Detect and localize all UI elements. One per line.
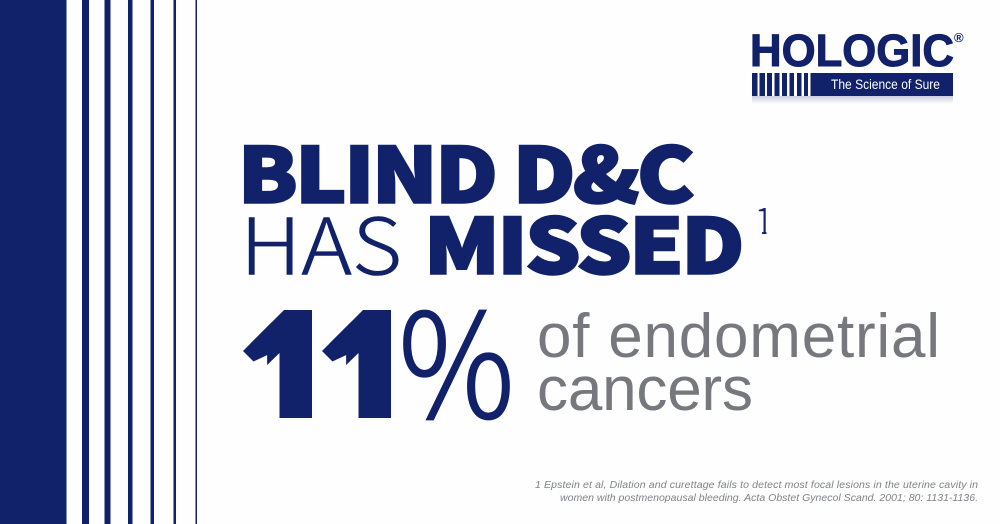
striped band [0, 0, 197, 524]
registered mark: ® [954, 30, 964, 45]
word: HAS: HAS [240, 186, 402, 298]
footnote marker: 1 [754, 191, 774, 245]
logo tagline: The Science of Sure [831, 77, 940, 92]
logo wordmark: HOLOGIC [750, 25, 954, 76]
digit 1: 1 [237, 285, 347, 450]
description line 2: cancers [537, 355, 753, 424]
heading line 2 [248, 208, 766, 276]
statistic description [537, 302, 940, 424]
citation [535, 479, 978, 504]
heading line 1: BLIND D&C [238, 114, 692, 224]
citation line 2: women with postmenopausal bleeding. Acta Obstet Gynecol Scand. 2001; 80: 1131-1136. [560, 492, 978, 504]
word: MISSED: MISSED [424, 186, 742, 296]
digit 2: 1 [316, 285, 426, 450]
percent sign: % [398, 252, 514, 460]
logo reflection [752, 96, 953, 104]
statistic: 11% [243, 310, 510, 420]
logo bars [752, 73, 953, 96]
logo: Hologic [750, 25, 964, 104]
citation line 1: 1 Epstein et al, Dilation and curettage fails to detect most focal lesions in the uterine cavity in [535, 479, 978, 491]
description line 1: of endometrial [537, 302, 940, 371]
